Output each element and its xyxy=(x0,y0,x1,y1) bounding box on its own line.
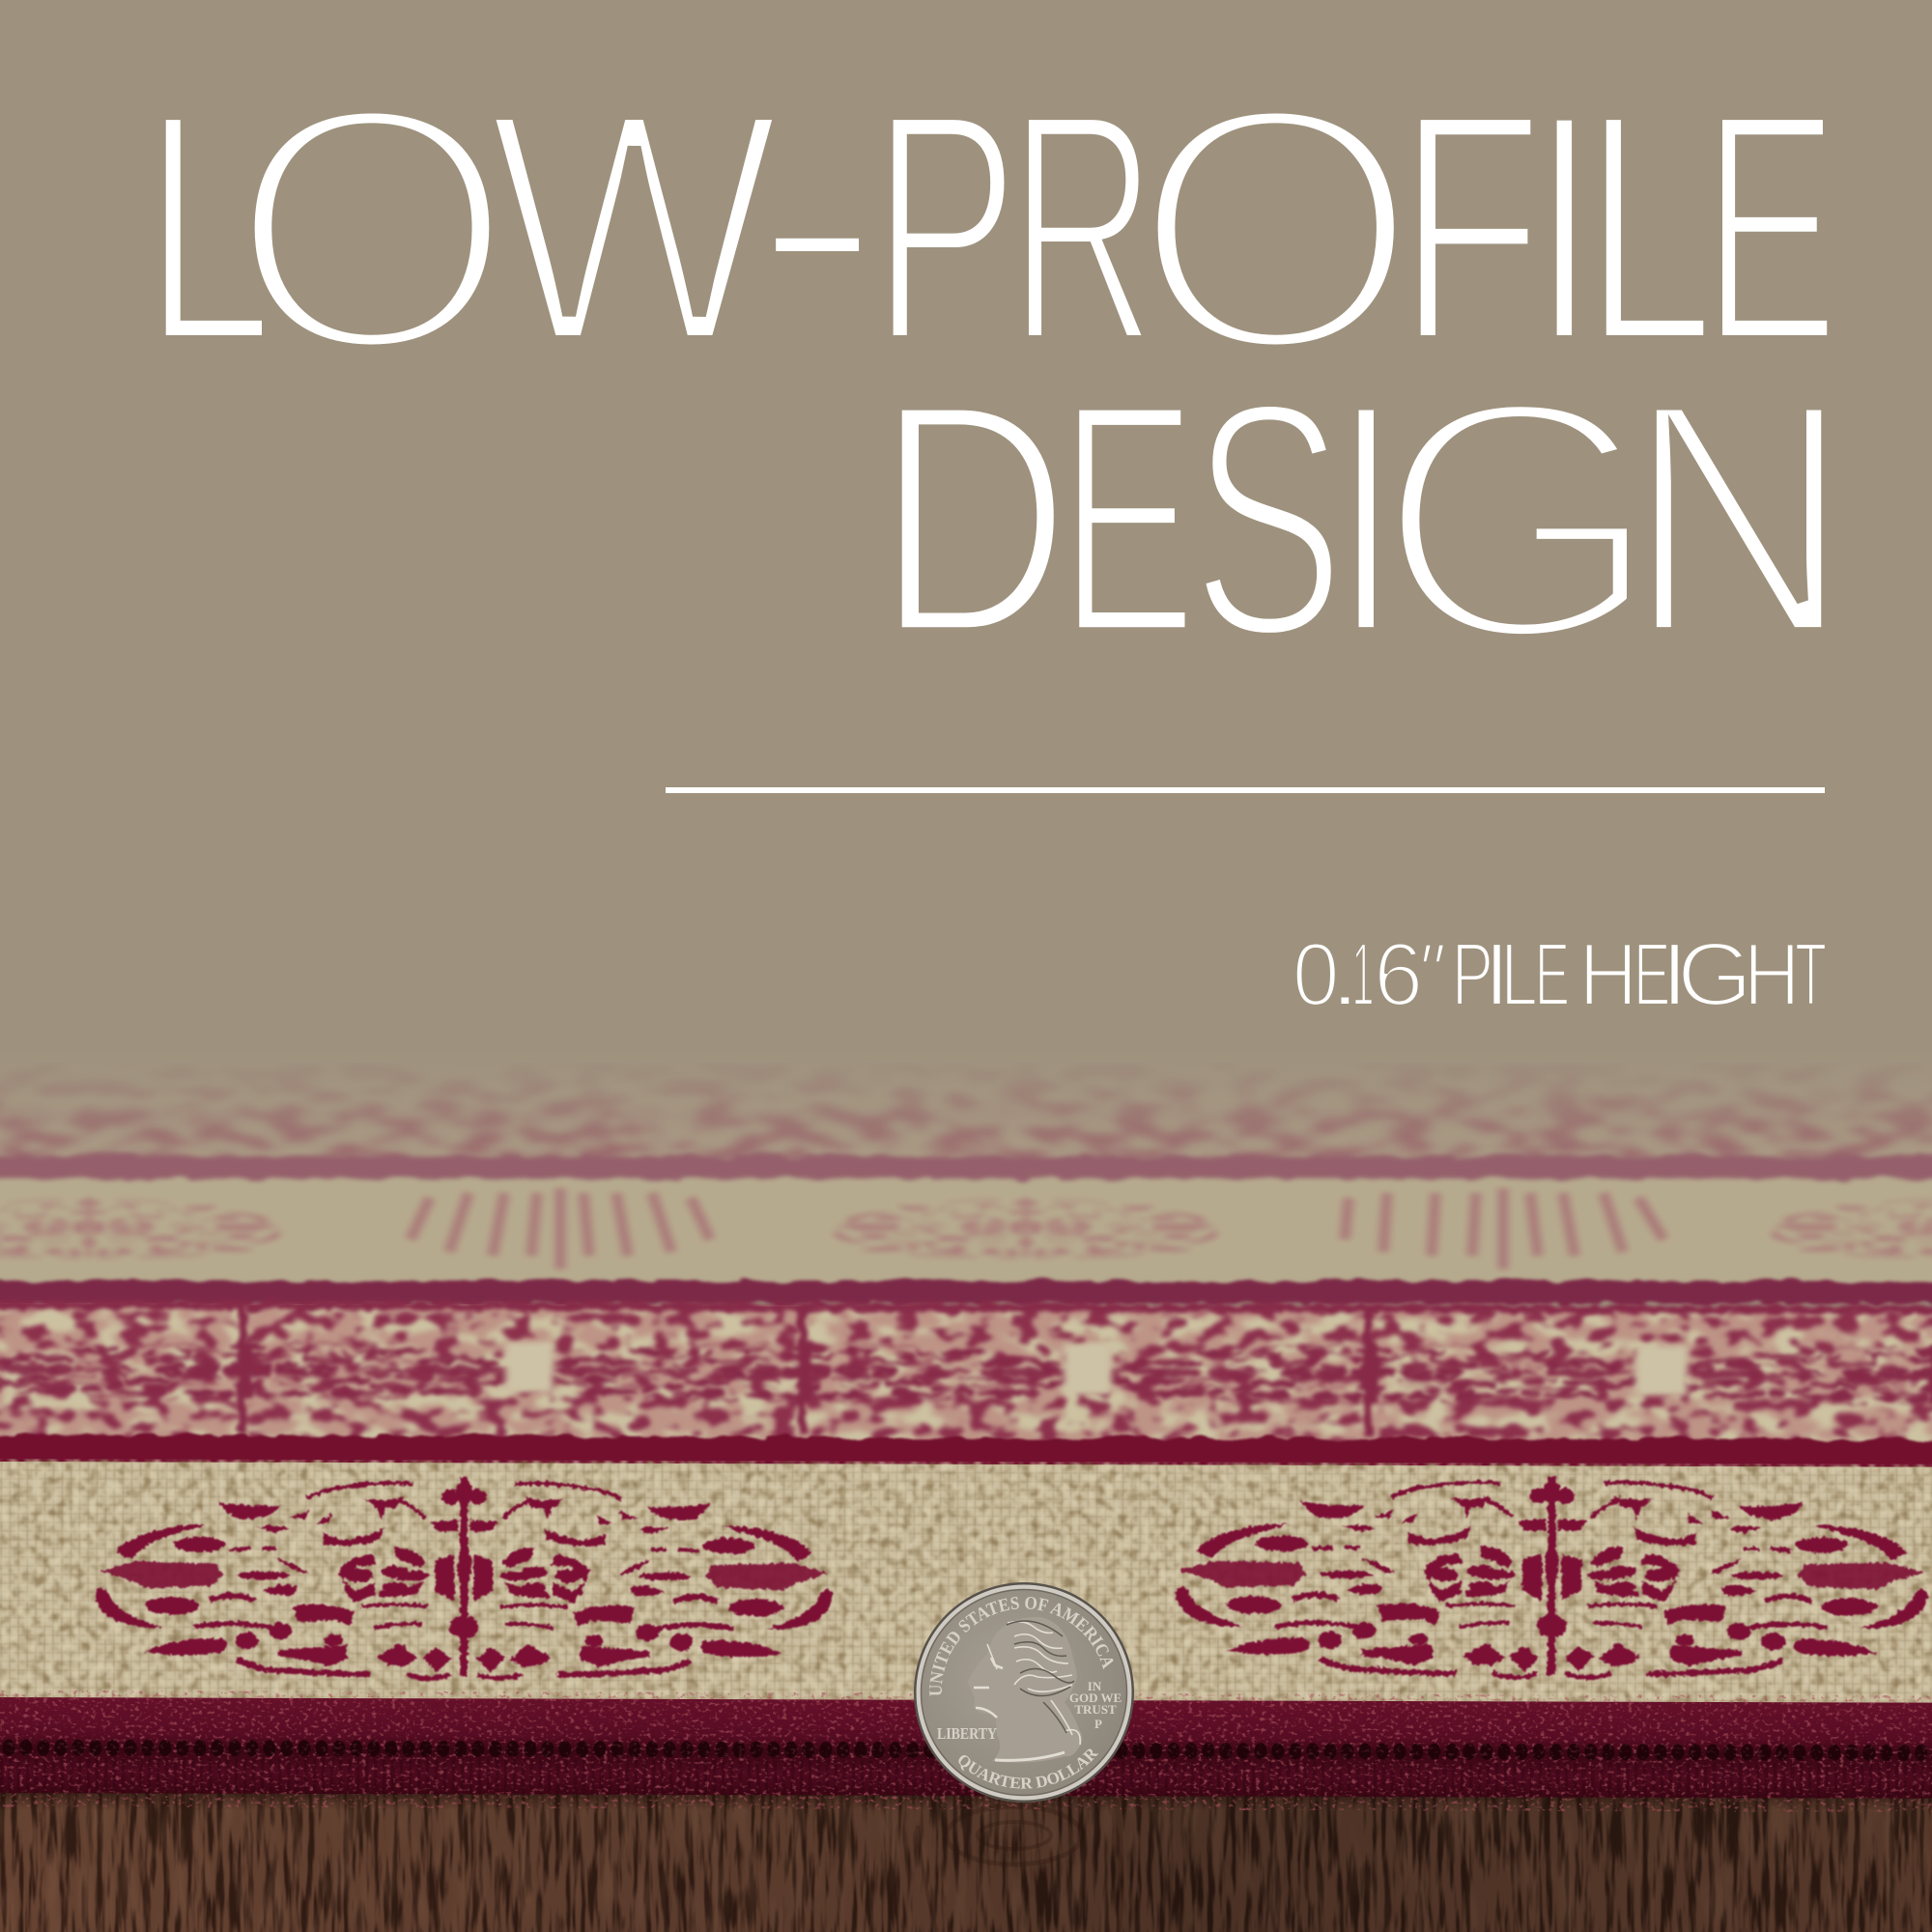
title line 2: I xyxy=(1320,328,1413,708)
coin motto xyxy=(1069,1679,1122,1731)
light gaps between tiles xyxy=(505,1342,1688,1396)
subtitle: pile height: T xyxy=(1795,926,1827,1025)
subtitle: pile height: I xyxy=(1482,924,1512,1025)
title line 2 xyxy=(875,327,1853,712)
subtitle: pile height: L xyxy=(1500,925,1538,1025)
fade of the far rug into background xyxy=(0,1038,1932,1159)
lower rug group with slight tilt xyxy=(0,1298,1932,1799)
divider line xyxy=(666,787,1825,793)
patterned border band xyxy=(0,1298,1932,1446)
title line 1: E xyxy=(1702,43,1839,410)
subtitle: pile height: " xyxy=(1406,924,1452,1024)
subtitle: pile height: E xyxy=(1634,925,1670,1025)
subtitle: pile height: 1 xyxy=(1352,925,1374,1025)
far maroon line xyxy=(0,1155,1932,1179)
title line 2: G xyxy=(1375,327,1663,712)
upper cream band with faint motifs xyxy=(0,1173,1932,1285)
wood floor xyxy=(0,1787,1932,1932)
subtitle: pile height: H xyxy=(1744,925,1800,1025)
title line 1: - xyxy=(750,29,885,406)
subtitle: pile height: . xyxy=(1327,925,1363,1025)
title line 1: O xyxy=(1131,33,1421,424)
title line 1: O xyxy=(228,33,516,425)
title line 1: W xyxy=(486,41,785,414)
subtitle: pile height: P xyxy=(1452,924,1493,1024)
title line 2: D xyxy=(875,334,1071,703)
maroon line above patterned band xyxy=(0,1281,1932,1304)
coin motto: IN xyxy=(1088,1679,1102,1693)
subtitle: pile height: 6 xyxy=(1374,924,1423,1025)
subtitle: pile height: I xyxy=(1660,924,1690,1025)
title line 2: E xyxy=(1059,334,1197,703)
coin motto: GOD WE xyxy=(1069,1690,1122,1705)
coin motto: P xyxy=(1094,1717,1102,1731)
maroon rug edge xyxy=(0,1697,1932,1799)
subtitle: pile height: 0 xyxy=(1293,925,1340,1025)
right medallion xyxy=(1176,1475,1928,1679)
coin legend: liberty: LIBERTY xyxy=(937,1724,997,1743)
title line 2: S xyxy=(1191,333,1345,706)
title line 1: R xyxy=(1009,45,1157,412)
subtitle: pile height: E xyxy=(1535,925,1570,1025)
title line 2: N xyxy=(1625,332,1853,705)
subtitle: pile height xyxy=(1293,924,1827,1025)
title xyxy=(143,29,1853,712)
title line 1 xyxy=(143,29,1839,425)
medallion motifs xyxy=(96,1472,1928,1683)
burlap cream field xyxy=(0,1462,1932,1707)
dark red band xyxy=(0,1435,1932,1470)
wood knot xyxy=(918,1799,1122,1932)
subtitle: pile height: H xyxy=(1578,924,1637,1025)
title line 1: I xyxy=(1518,39,1611,415)
rug: photograph scene xyxy=(0,1038,1932,1932)
left medallion xyxy=(96,1476,833,1679)
coin legend: bottom: QUARTER DOLLAR xyxy=(958,1748,1099,1789)
title line 1: L xyxy=(1583,43,1715,411)
subtitle: pile height: G xyxy=(1677,924,1753,1025)
title line 1: L xyxy=(143,43,273,411)
coin portrait xyxy=(968,1617,1082,1763)
coin motto: TRUST xyxy=(1074,1702,1117,1717)
far rug band xyxy=(0,1053,1932,1164)
radiating stripes xyxy=(411,1188,1663,1269)
title line 1: P xyxy=(871,44,1019,411)
icon: quarter coin xyxy=(875,1582,1177,1810)
coin legend: top: UNITED STATES OF AMERICA xyxy=(929,1597,1113,1696)
title line 1: F xyxy=(1397,45,1544,411)
